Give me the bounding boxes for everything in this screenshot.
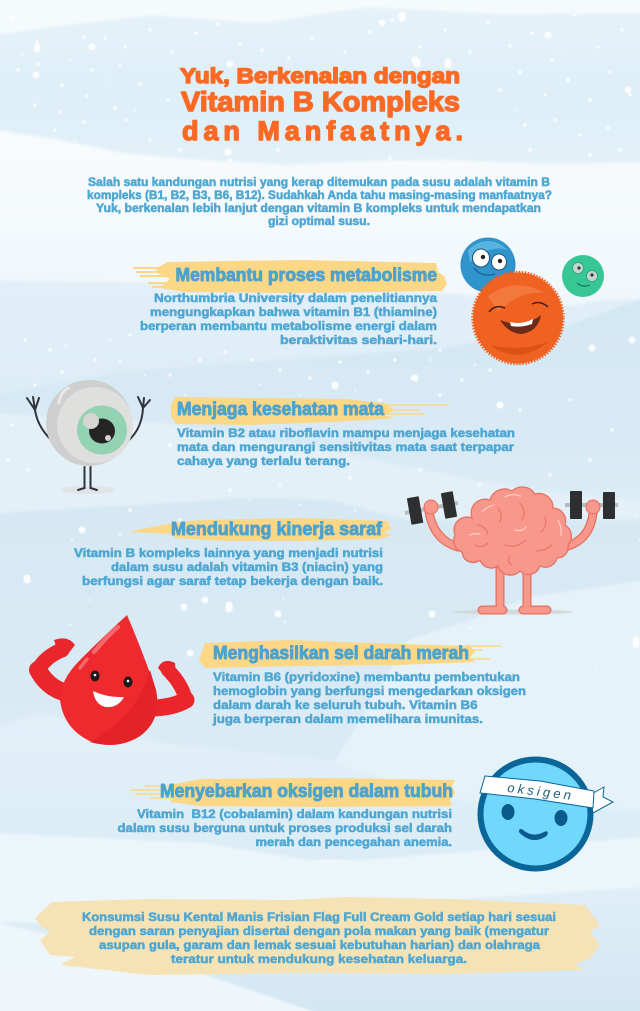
- icon: eyeball character: [27, 380, 150, 494]
- body text: eye health: cahaya yang terlalu terang.: [177, 454, 350, 468]
- body text: nerve function: dalam susu adalah vitamin B3 (niacin) yang: [111, 560, 383, 574]
- heading: nerve function: Mendukung kinerja saraf: [171, 519, 383, 539]
- intro paragraph: Yuk, berkenalan lebih lanjut dengan vitamin B kompleks untuk mendapatkan: [96, 201, 541, 215]
- intro paragraph: gizi optimal susu.: [268, 214, 370, 228]
- heading: oxygen: Menyebarkan oksigen dalam tubuh: [160, 781, 453, 801]
- panel: oxygen: [118, 778, 455, 849]
- body text: nerve function: berfungsi agar saraf tetap bekerja dengan baik.: [82, 574, 383, 588]
- closing text: asupan gula, garam dan lemak sesuai kebutuhan harian) dan olahraga: [99, 938, 540, 952]
- brain body: [454, 487, 571, 575]
- heading: metabolism: Membantu proses metabolisme: [176, 265, 437, 285]
- intro paragraph: kompleks (B1, B2, B3, B6, B12). Sudahkah Anda tahu masing-masing manfaatnya?: [87, 188, 552, 202]
- heading: red blood cells: Menghasilkan sel darah merah: [213, 643, 469, 663]
- arms: [38, 650, 186, 708]
- heading: eye health: Menjaga kesehatan mata: [177, 399, 385, 419]
- body text: nerve function: Vitamin B kompleks lainnya yang menjadi nutrisi: [74, 546, 383, 560]
- dumbbells: [405, 491, 618, 525]
- body text: metabolism: mengungkapkan bahwa vitamin B1 (thiamine): [150, 305, 437, 319]
- brush highlight: red blood cells: [199, 640, 501, 668]
- body text: metabolism: berperan membantu metabolisme energi dalam: [140, 319, 437, 333]
- brush highlight: nerve function: [129, 518, 392, 541]
- body text: metabolism: beraktivitas sehari-hari.: [280, 333, 437, 347]
- body text: nerve function: [74, 546, 383, 588]
- body text: metabolism: Northumbria University dalam penelitiannya: [154, 291, 437, 305]
- body text: red blood cells: dalam darah ke seluruh tubuh. Vitamin B6: [213, 698, 478, 712]
- body text: oxygen: merah dan pencegahan anemia.: [256, 835, 452, 849]
- headband: [590, 787, 613, 813]
- closing text: dengan saran penyajian disertai dengan pola makan yang baik (mengatur: [89, 924, 549, 938]
- body text: oxygen: dalam susu berguna untuk proses produksi sel darah: [118, 821, 452, 835]
- arms and legs: [429, 512, 593, 610]
- brush highlight: eye health: [171, 397, 449, 425]
- icon: oxygen character: [480, 760, 613, 868]
- panel: nerve function: [74, 518, 392, 588]
- panel: closing note: [35, 897, 600, 975]
- title: Vitamin B Kompleks: [181, 86, 460, 117]
- smile: [519, 829, 548, 840]
- body text: red blood cells: [212, 670, 526, 726]
- icon: green ball: [562, 255, 604, 297]
- icon: oxygen character: oksigen: [507, 780, 575, 803]
- intro paragraph: [87, 175, 552, 228]
- panel: red blood cells: [199, 640, 526, 726]
- title: [180, 65, 463, 146]
- panel: eye health: [171, 397, 515, 468]
- body text: oxygen: Vitamin B12 (cobalamin) dalam kandungan nutrisi: [137, 807, 452, 821]
- icon: fuzzy vitamin characters: [460, 238, 604, 364]
- brush background: [35, 897, 600, 975]
- body text: eye health: mata dan mengurangi sensitivitas mata saat terpapar: [177, 440, 514, 454]
- title: Yuk, Berkenalan dengan: [180, 65, 460, 88]
- icon: orange ball: [472, 272, 564, 364]
- body text: oxygen: [118, 807, 452, 849]
- icon: blood drop character: [38, 615, 186, 745]
- body text: red blood cells: Vitamin B6 (pyridoxine) membantu pembentukan: [213, 670, 520, 684]
- icon: brain lifting dumbbells: [405, 487, 618, 614]
- body text: eye health: [177, 426, 515, 468]
- body text: red blood cells: hemoglobin yang berfungsi mengedarkan oksigen: [213, 684, 526, 698]
- snow dots: [8, 15, 640, 680]
- closing text: Konsumsi Susu Kental Manis Frisian Flag Full Cream Gold setiap hari sesuai: [82, 910, 556, 924]
- body text: eye health: Vitamin B2 atau riboflavin mampu menjaga kesehatan: [177, 426, 515, 440]
- closing text: [82, 910, 556, 966]
- brush highlight: metabolism: [133, 260, 447, 293]
- brush highlight: oxygen: [130, 778, 455, 807]
- icon: blue ball: [460, 238, 516, 292]
- drop body: [60, 615, 157, 745]
- body text: red blood cells: juga berperan dalam memelihara imunitas.: [212, 712, 483, 726]
- closing text: teratur untuk mendukung kesehatan keluarga.: [171, 952, 467, 966]
- panel: metabolism: [133, 260, 447, 347]
- body text: metabolism: [140, 291, 437, 347]
- intro paragraph: Salah satu kandungan nutrisi yang kerap ditemukan pada susu adalah vitamin B: [88, 175, 550, 189]
- title: dan Manfaatnya.: [182, 116, 463, 146]
